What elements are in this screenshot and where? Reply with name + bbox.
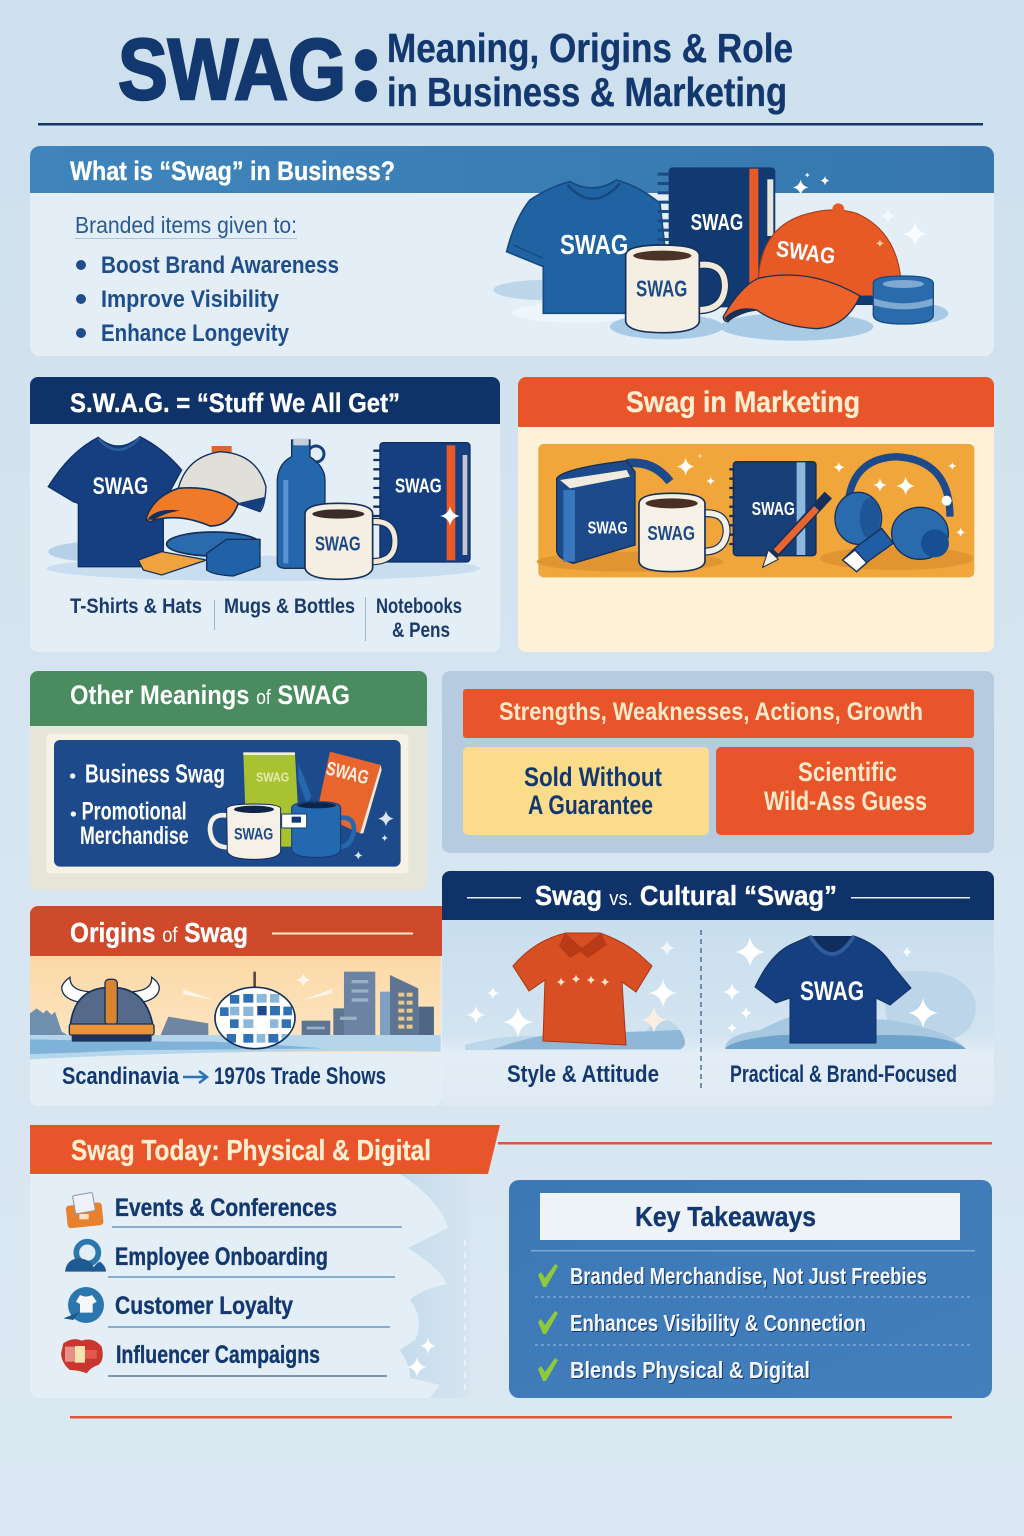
list item: customer loyalty: Customer Loyalty (115, 1292, 293, 1320)
title: in Business & Marketing (387, 69, 787, 115)
label: notebooks and pens: Notebooks (376, 595, 462, 618)
label: t-shirts and hats: T-Shirts & Hats (70, 595, 202, 618)
sparkles (407, 1338, 436, 1377)
list item: employee onboarding (65, 1242, 395, 1278)
illustration: shirt, notebook, mug, cap, disks: SWAG (775, 235, 837, 269)
icon: red polo shirt (513, 933, 652, 1045)
list item: employee onboarding: Employee Onboarding (115, 1243, 328, 1271)
card: sold without a guarantee: A Guarantee (528, 790, 653, 820)
illustration: book, mug, notebook, pen, headphones, usb (537, 444, 974, 577)
heading: swag in marketing: Swag in Marketing (626, 386, 860, 419)
takeaway: physical and digital: Blends Physical & Digital (570, 1357, 810, 1383)
illustration: shirt, notebook, mug, cap, disks: SWAG (560, 229, 628, 260)
icon: blue swag t-shirt: SWAG (800, 976, 864, 1006)
illustration: shirt, cap, bottle, mug, notebook: SWAG (395, 474, 442, 497)
illustration: shirt, cap, bottle, mug, notebook: SWAG (93, 473, 148, 500)
illustration: shirt, notebook, mug, cap, disks (493, 167, 948, 341)
panel: stuff we all get (30, 377, 500, 652)
label: notebooks and pens (376, 595, 462, 642)
bullet list: Enhance Longevity (101, 320, 290, 347)
card: scientific wild-ass guess: Wild-Ass Guess (764, 786, 927, 816)
panel: swag in marketing (518, 377, 994, 652)
illustration: shirt, cap, bottle, mug, notebook: SWAG (315, 534, 361, 556)
intro text: Branded items given to: (75, 212, 297, 238)
card: sold without a guarantee (463, 747, 709, 835)
illustration: viking helmet to disco ball and trade show city (30, 956, 441, 1059)
bullet list: Boost Brand Awareness (101, 252, 339, 279)
label: mugs and bottles: Mugs & Bottles (224, 595, 355, 618)
title: SWAG (118, 22, 346, 118)
heading: swag today: Swag Today: Physical & Digital (71, 1135, 431, 1167)
list item: events and conferences (66, 1192, 402, 1228)
heading: swag vs cultural: Swag vs. Cultural “Swag” (535, 880, 837, 911)
label: scandinavia to 1970s trade shows: Scandinavia (62, 1063, 180, 1090)
illustration: book, mug, notebook, pen, headphones, usb: SWAG (588, 517, 628, 537)
panel: swag today (30, 1125, 992, 1398)
panel: what is swag in business (30, 146, 994, 356)
bullet list (76, 252, 339, 347)
card: sold without a guarantee: Sold Without (524, 762, 662, 792)
label: scandinavia to 1970s trade shows: 1970s Trade Shows (214, 1063, 386, 1090)
panel: strengths, weaknesses, actions, growth (442, 671, 994, 853)
framed card: business swag: Business Swag (85, 759, 225, 789)
framed card: business swag: SWAG (234, 824, 273, 843)
heading: swag acronym: S.W.A.G. = “Stuff We All Get” (70, 388, 400, 418)
label: scandinavia to 1970s trade shows (62, 1063, 386, 1090)
framed card: business swag: Promotional (82, 798, 187, 825)
illustration: shirt, cap, bottle, mug, notebook (47, 437, 480, 581)
title (118, 22, 793, 118)
sparkles (467, 937, 938, 1037)
framed card: business swag: SWAG (324, 758, 371, 789)
heading: key takeaways (540, 1193, 960, 1240)
list item: events and conferences: Events & Conferences (115, 1194, 337, 1222)
illustration: book, mug, notebook, pen, headphones, usb: SWAG (752, 498, 795, 519)
framed card: business swag: SWAG (256, 770, 289, 785)
illustration: shirt, notebook, mug, cap, disks: SWAG (636, 276, 687, 302)
heading: what is swag: What is “Swag” in Business? (70, 156, 395, 186)
heading: origins: Origins of Swag (70, 917, 248, 948)
bullet list: Improve Visibility (101, 286, 280, 313)
card: scientific wild-ass guess (716, 747, 974, 835)
framed card: business swag (47, 734, 408, 873)
label: style and attitude: Style & Attitude (507, 1061, 659, 1088)
heading: other meanings: Other Meanings of SWAG (70, 680, 350, 710)
icon: blue swag t-shirt (755, 936, 911, 1043)
heading: key takeaways: Key Takeaways (635, 1201, 816, 1232)
list item: customer loyalty (63, 1287, 390, 1328)
list item: influencer campaigns (61, 1339, 387, 1377)
panel: origins of swag (30, 906, 442, 1106)
takeaway: branded merchandise: Branded Merchandise, Not Just Freebies (570, 1263, 927, 1289)
illustration: shirt, notebook, mug, cap, disks: SWAG (691, 209, 743, 235)
takeaway: visibility and connection: Enhances Visibility & Connection (570, 1310, 866, 1336)
heading: strengths bar: Strengths, Weaknesses, Actions, Growth (499, 698, 923, 726)
heading: strengths bar (463, 689, 974, 738)
panel: swag vs cultural swag (442, 871, 994, 1106)
list item: influencer campaigns: Influencer Campaigns (116, 1341, 320, 1369)
panel: other meanings of swag (30, 671, 427, 890)
card: scientific wild-ass guess: Scientific (798, 757, 897, 787)
illustration: book, mug, notebook, pen, headphones, usb: SWAG (647, 522, 695, 545)
panel: key takeaways (509, 1180, 992, 1398)
label: notebooks and pens: & Pens (392, 619, 450, 642)
title: Meaning, Origins & Role (387, 25, 793, 71)
framed card: business swag: Merchandise (80, 823, 189, 850)
